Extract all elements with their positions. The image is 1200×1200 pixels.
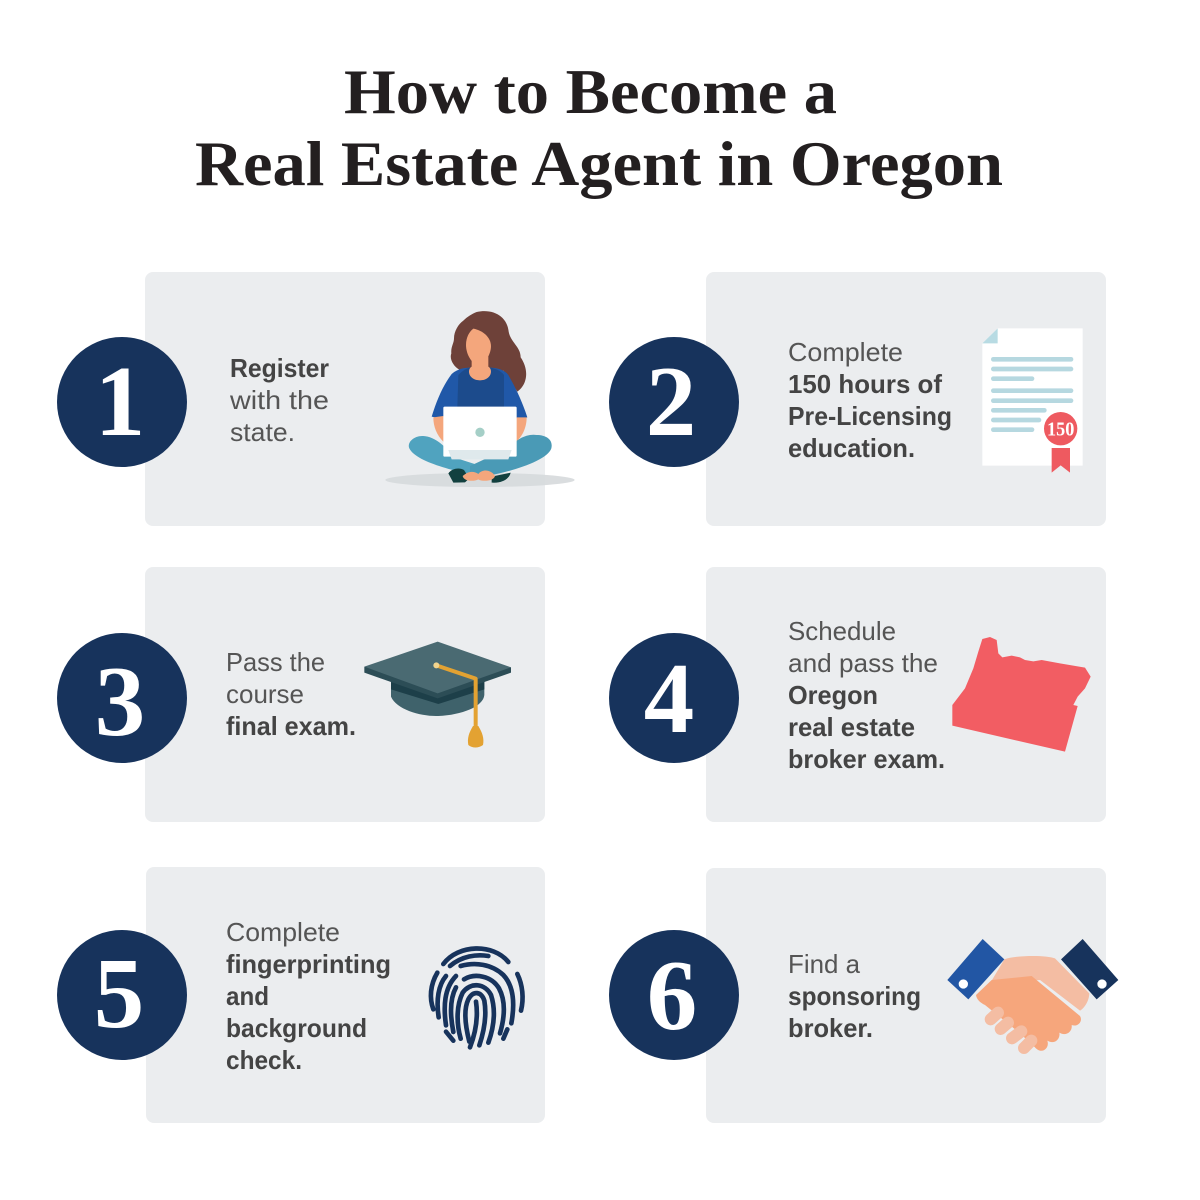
step 1 text: state. xyxy=(230,417,295,447)
step 2 text: 150 hours of xyxy=(788,369,942,399)
step 5 text: fingerprinting xyxy=(226,949,391,979)
step 2 text: Complete xyxy=(788,337,903,367)
icon: certificate document: 150 xyxy=(1047,418,1074,440)
icon: certificate document xyxy=(982,328,1083,473)
icon: graduation cap xyxy=(364,642,511,747)
panel: step 2 education xyxy=(609,272,1106,526)
panel: step 6 sponsoring broker xyxy=(609,868,1118,1123)
number badge 4 xyxy=(609,633,739,763)
step 1 text: with the xyxy=(229,385,329,415)
number badge 3 xyxy=(57,633,187,763)
title: Real Estate Agent in Oregon xyxy=(195,128,1003,199)
step 2 text: Pre-Licensing xyxy=(788,401,952,431)
icon: woman with laptop xyxy=(385,311,575,487)
number badge 2: 2 xyxy=(646,345,696,457)
panel: step 1 register xyxy=(57,272,575,526)
step 6 text: Find a xyxy=(788,949,861,979)
icon: map of Oregon xyxy=(952,637,1091,752)
number badge 3: 3 xyxy=(95,645,145,757)
step 2 text xyxy=(788,337,952,463)
step 4 text: broker exam. xyxy=(788,744,945,774)
panel: step 4 broker exam xyxy=(609,567,1106,822)
step 5 text: check. xyxy=(226,1045,302,1075)
title: How to Become a xyxy=(344,56,837,127)
step 4 text: real estate xyxy=(788,712,915,742)
number badge 4: 4 xyxy=(644,642,694,754)
step 3 text xyxy=(226,647,356,741)
step 5 text xyxy=(226,917,391,1075)
number badge 5: 5 xyxy=(94,937,144,1049)
step 5 text: background xyxy=(226,1013,367,1043)
step 6 text: broker. xyxy=(788,1013,873,1043)
step 2 text: education. xyxy=(788,433,915,463)
step 4 text: and pass the xyxy=(788,648,938,678)
step 1 text xyxy=(229,353,329,447)
step 4 text: Schedule xyxy=(788,616,896,646)
panel: step 5 fingerprinting xyxy=(57,867,545,1123)
step 3 text: final exam. xyxy=(226,711,356,741)
title xyxy=(195,56,1003,199)
step 3 text: Pass the xyxy=(226,647,325,677)
icon: fingerprint xyxy=(431,948,523,1047)
number badge 1: 1 xyxy=(95,345,145,457)
step 1 text: Register xyxy=(230,353,329,383)
number badge 5 xyxy=(57,930,187,1060)
step 4 text xyxy=(788,616,945,774)
number badge 6: 6 xyxy=(647,939,697,1051)
step 5 text: Complete xyxy=(226,917,340,947)
number badge 2 xyxy=(609,337,739,467)
step 6 text xyxy=(788,949,921,1043)
number badge 1 xyxy=(57,337,187,467)
number badge 6 xyxy=(609,930,739,1060)
step 3 text: course xyxy=(226,679,304,709)
step 5 text: and xyxy=(226,981,269,1011)
step 6 text: sponsoring xyxy=(788,981,921,1011)
panel: step 3 final exam xyxy=(57,567,545,822)
icon: handshake xyxy=(947,939,1118,1051)
step 4 text: Oregon xyxy=(788,680,878,710)
